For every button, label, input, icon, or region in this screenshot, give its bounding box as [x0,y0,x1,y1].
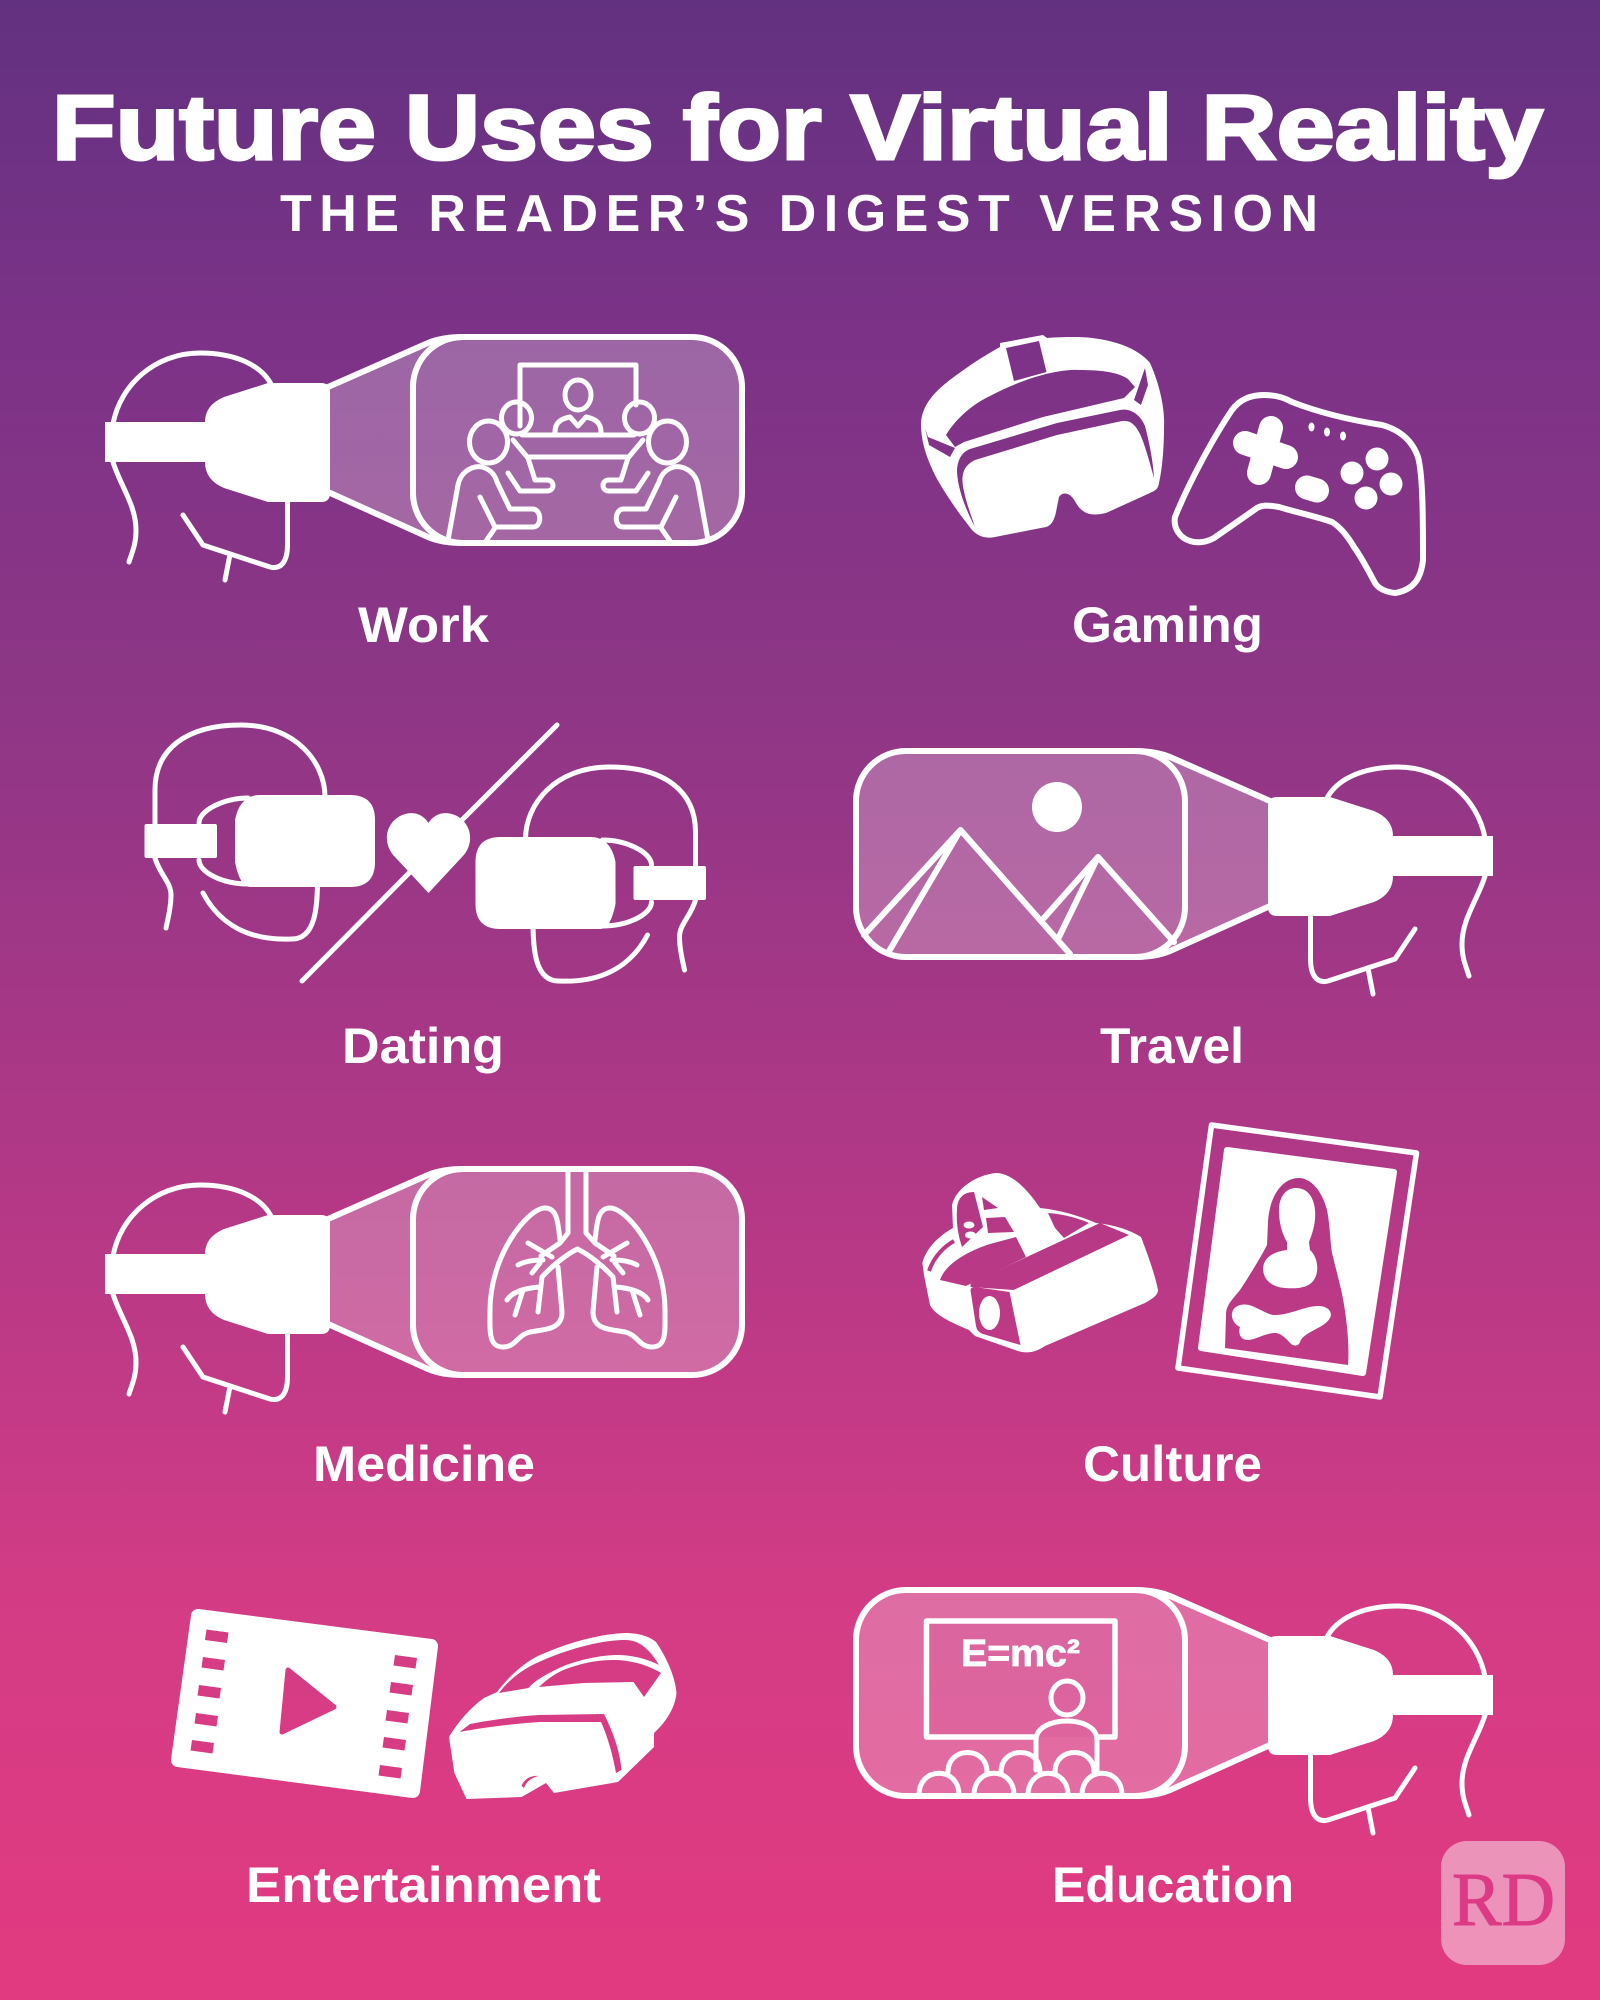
title: Future Uses for Virtual Reality [52,77,1543,179]
panel: work [105,337,742,653]
icon: game controller [1175,395,1423,593]
icon: VR headset [921,335,1164,538]
icon: head with VR headset projecting a screen [105,1169,742,1412]
label: travel: Travel [1100,1018,1244,1074]
label: education: Education [1052,1857,1294,1913]
icon: diagonal divider line [302,725,557,981]
label: entertainment: Entertainment [246,1857,601,1913]
label: medicine: Medicine [313,1436,535,1492]
subtitle: THE READER’S DIGEST VERSION [280,185,1318,243]
icon: VR headset [922,1173,1158,1352]
icon: right head with headset [476,767,706,981]
logo: RD badge [1441,1841,1565,1965]
icon: lungs [490,1172,665,1347]
icon: VR headset [449,1633,676,1799]
icon: classroom [919,1621,1122,1795]
panel: education [856,1590,1493,1913]
label: gaming: Gaming [1072,597,1263,653]
icon: head with VR headset projecting a screen [105,337,742,580]
logo: RD badge: RD [1452,1858,1555,1942]
icon: film strip with play button [178,1616,431,1791]
icon: framed portrait [1178,1125,1416,1397]
label: work: Work [358,597,489,653]
panel: medicine [105,1169,742,1492]
panel: gaming [921,335,1423,653]
panel: dating [144,725,706,1074]
icon: meeting room [448,365,708,541]
equation: E=mc² [961,1633,1080,1675]
label: culture: Culture [1083,1436,1262,1492]
panel: culture [922,1125,1416,1492]
icon: head with VR headset projecting a screen [856,1590,1493,1833]
icon: head with VR headset projecting a screen [856,751,1493,994]
icon: mountains and sun [864,782,1174,954]
panel: travel [856,751,1493,1074]
label: dating: Dating [342,1018,504,1074]
icon: heart [387,813,470,893]
panel: entertainment [178,1616,676,1913]
icon: left head with headset [144,725,375,939]
